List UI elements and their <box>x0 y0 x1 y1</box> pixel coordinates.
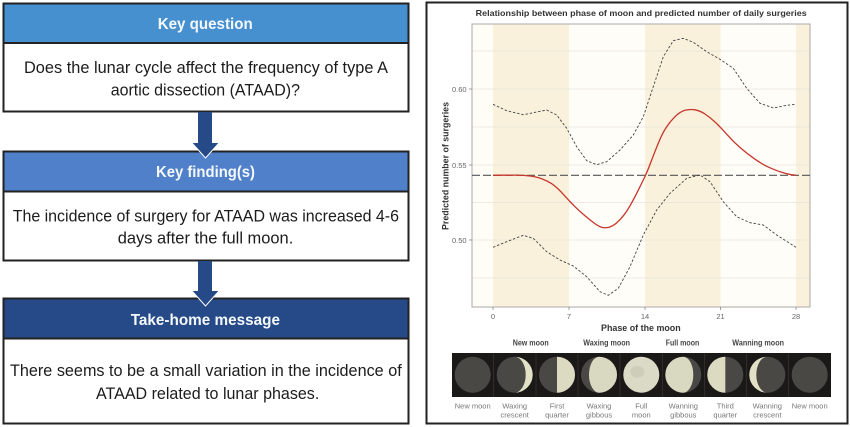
moon phase names: gibbous <box>586 410 612 420</box>
text: take-home body: There seems to be a small variation in the incidence of <box>10 361 402 380</box>
y axis title: Predicted number of surgeries <box>440 102 452 230</box>
panel: take-home message <box>4 298 408 424</box>
header: key findings <box>4 152 408 192</box>
x axis tick labels: 14 <box>641 312 649 321</box>
moon phase group labels: Waxing moon <box>583 338 630 347</box>
text: key question body: Does the lunar cycle affect the frequency of type A <box>24 58 389 77</box>
text: take-home body: ATAAD related to lunar phases. <box>96 384 319 403</box>
moon phase names: crescent <box>753 410 782 420</box>
moon phase group labels: New moon <box>513 338 549 347</box>
moon: waning crescent <box>749 357 785 393</box>
arrow: question to finding <box>192 112 219 158</box>
text: key question body: aortic dissection (ATAAD)? <box>111 80 300 100</box>
predicted curve <box>493 109 796 228</box>
panel: key findings <box>4 152 408 260</box>
moon phase names: gibbous <box>670 410 697 420</box>
text: key findings body: days after the full moon. <box>118 229 293 248</box>
moon: waxing gibbous <box>581 357 617 393</box>
x axis tick labels: 7 <box>567 312 571 321</box>
panel: key question <box>4 4 408 112</box>
upper confidence curve <box>493 38 796 165</box>
x axis title: Phase of the moon <box>601 323 681 334</box>
y axis tick labels: 0.50 <box>452 236 467 245</box>
moon: new <box>455 357 491 393</box>
x axis tick labels: 21 <box>716 312 725 321</box>
y axis tick labels: 0.55 <box>452 161 467 170</box>
moon phase names: Full <box>635 402 648 410</box>
moon phase names: Waxing <box>587 402 611 410</box>
x axis tick labels: 0 <box>491 312 495 321</box>
lower confidence curve <box>493 175 796 295</box>
moon phase names: moon <box>632 410 651 420</box>
y axis tick labels: 0.60 <box>452 85 467 94</box>
arrow: finding to take-home <box>192 261 219 306</box>
moon phase group labels: Full moon <box>666 338 699 347</box>
moon phase names: Wanning <box>669 402 698 410</box>
moon phase names: New moon <box>455 402 491 410</box>
header: key question <box>4 4 408 43</box>
moon: waxing crescent <box>497 357 533 393</box>
moon phase names: New moon <box>792 402 828 410</box>
moon phase names: Wanning <box>753 402 782 410</box>
moon phase names: First <box>550 402 565 410</box>
header: key findings: Key finding(s) <box>156 164 255 181</box>
text: key findings body: The incidence of surgery for ATAAD was increased 4-6 <box>13 207 399 226</box>
moon: full <box>623 357 659 393</box>
moon phase names: Third <box>717 402 734 410</box>
moon: waning gibbous <box>665 357 701 393</box>
moon phase names: quarter <box>545 410 569 420</box>
moon phase names <box>455 402 828 420</box>
panel: lunar chart <box>426 2 848 424</box>
moon: third quarter <box>707 357 743 393</box>
x axis tick labels <box>491 312 800 321</box>
moon phase names: crescent <box>501 410 530 420</box>
reference line <box>472 174 810 176</box>
moon: first quarter <box>539 357 575 393</box>
x axis tick labels: 28 <box>792 312 800 321</box>
line chart: predicted surgeries by phase <box>469 24 810 310</box>
moon: new (end) <box>792 357 828 393</box>
moon phase group labels <box>513 338 784 347</box>
moon phase names: Waxing <box>502 402 527 410</box>
moon phase group labels: Wanning moon <box>732 338 784 347</box>
header: key question: Key question <box>158 16 253 33</box>
moon phase names: quarter <box>713 410 738 420</box>
y axis tick labels <box>452 85 467 245</box>
chart title: Relationship between phase of moon and predicted number of daily surgeries <box>476 8 807 18</box>
header: take-home message: Take-home message <box>131 312 280 329</box>
header: take-home message <box>4 298 408 338</box>
moon phase strip <box>452 353 831 397</box>
